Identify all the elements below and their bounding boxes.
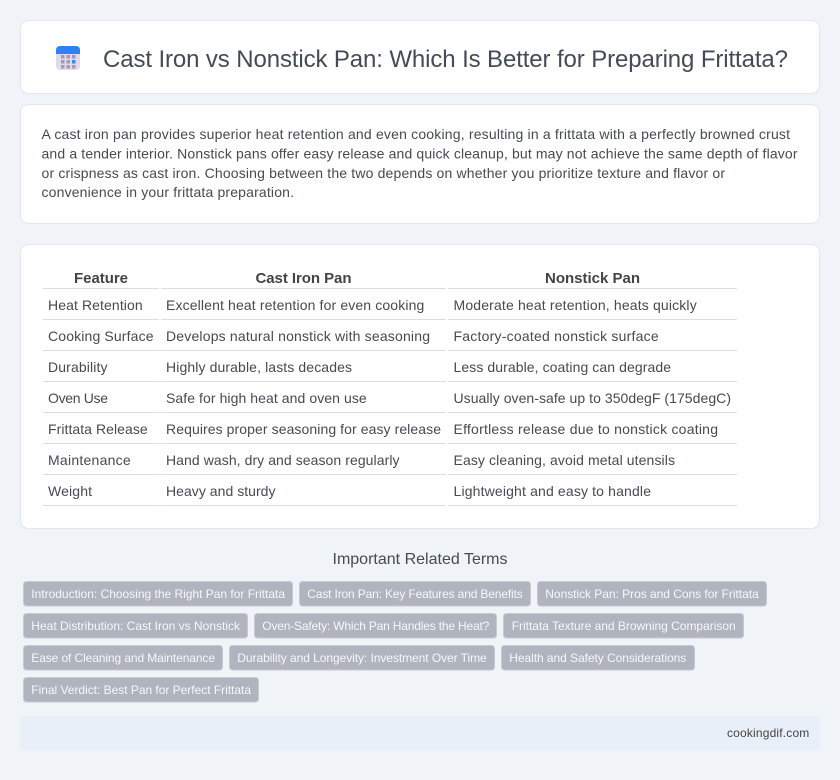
table row: maintenance: Easy cleaning, avoid metal utensils bbox=[454, 452, 675, 468]
table row: cooking surface bbox=[43, 328, 737, 351]
tag bbox=[538, 582, 766, 606]
table row: maintenance: Hand wash, dry and season regularly bbox=[166, 452, 400, 468]
panel: comparison table bbox=[20, 244, 820, 528]
footer source text: cookingdif.com bbox=[727, 726, 809, 740]
tag: Ease of Cleaning and Maintenance bbox=[31, 651, 215, 665]
table row: weight: Heavy and sturdy bbox=[166, 483, 276, 499]
table row: weight: Lightweight and easy to handle bbox=[454, 483, 651, 499]
text block: intro paragraph: A cast iron pan provides superior heat retention and even cooking, resulting in a frittata with a perfectly browned crust bbox=[42, 126, 790, 142]
table row: durability: Less durable, coating can degrade bbox=[454, 359, 671, 375]
table row: durability: Durability bbox=[48, 359, 108, 375]
text block: intro paragraph: convenience in your frittata preparation. bbox=[42, 184, 294, 200]
table row: maintenance bbox=[43, 452, 737, 475]
tag: Introduction: Choosing the Right Pan for Frittata bbox=[31, 587, 285, 601]
text block: intro paragraph: and a tender interior. Nonstick pans offer easy release and quick cleanup, but may not achieve the same depth of flavor bbox=[42, 146, 798, 162]
tag bbox=[24, 614, 248, 638]
table row: frittata release: Frittata Release bbox=[48, 421, 148, 437]
table row: durability bbox=[43, 359, 737, 382]
tag bbox=[24, 582, 292, 606]
table row: weight: Weight bbox=[48, 483, 92, 499]
tag bbox=[504, 614, 744, 638]
table row: weight bbox=[43, 483, 737, 506]
table row: oven use: Safe for high heat and oven use bbox=[166, 390, 367, 406]
table row: heat retention: Excellent heat retention for even cooking bbox=[166, 297, 424, 313]
tag bbox=[24, 646, 222, 670]
tag: Nonstick Pan: Pros and Cons for Frittata bbox=[545, 587, 759, 601]
tag: Frittata Texture and Browning Comparison bbox=[512, 619, 736, 633]
tag: Oven-Safety: Which Pan Handles the Heat? bbox=[262, 619, 490, 633]
table row: heat retention: Moderate heat retention, heats quickly bbox=[454, 297, 697, 313]
table row: frittata release: Effortless release due to nonstick coating bbox=[454, 421, 718, 437]
tag bbox=[254, 614, 496, 638]
table header row: Cast Iron Pan bbox=[256, 270, 352, 287]
table row: cooking surface: Cooking Surface bbox=[48, 328, 154, 344]
tag: Cast Iron Pan: Key Features and Benefits bbox=[307, 587, 523, 601]
text block: intro paragraph: or crispness as cast iron. Choosing between the two depends on whether you prioritize texture and flavor or bbox=[42, 165, 725, 181]
table row: frittata release bbox=[43, 421, 737, 444]
table row: oven use: Oven Use bbox=[48, 390, 108, 406]
panel: introduction text bbox=[20, 104, 820, 224]
tag: Heat Distribution: Cast Iron vs Nonstick bbox=[31, 619, 241, 633]
heading: related terms: Important Related Terms bbox=[332, 551, 508, 568]
table row: durability: Highly durable, lasts decades bbox=[166, 359, 352, 375]
tag bbox=[230, 646, 494, 670]
tag: Durability and Longevity: Investment Over Time bbox=[237, 651, 487, 665]
title: Cast Iron vs Nonstick Pan: Which Is Better for Preparing Frittata? bbox=[103, 46, 788, 73]
tag bbox=[502, 646, 694, 670]
footer bbox=[20, 716, 820, 750]
tag: Health and Safety Considerations bbox=[509, 651, 686, 665]
text block: intro paragraph bbox=[42, 126, 798, 200]
table row: heat retention bbox=[43, 297, 737, 320]
tag bbox=[300, 582, 530, 606]
table header row: Nonstick Pan bbox=[545, 270, 640, 287]
table header row: Feature bbox=[74, 270, 128, 287]
icon: calendar bbox=[56, 46, 80, 70]
table row: frittata release: Requires proper seasoning for easy release bbox=[166, 421, 441, 437]
table row: oven use: Usually oven-safe up to 350degF (175degC) bbox=[454, 390, 731, 406]
tag: Final Verdict: Best Pan for Perfect Frittata bbox=[31, 683, 251, 697]
table row: cooking surface: Factory-coated nonstick surface bbox=[454, 328, 659, 344]
table row: oven use bbox=[43, 390, 737, 413]
table row: heat retention: Heat Retention bbox=[48, 297, 143, 313]
panel: title header bbox=[20, 20, 820, 94]
tag bbox=[24, 678, 258, 702]
related terms tag list bbox=[24, 582, 766, 702]
table row: cooking surface: Develops natural nonstick with seasoning bbox=[166, 328, 430, 344]
table row: maintenance: Maintenance bbox=[48, 452, 131, 468]
table header row bbox=[43, 270, 737, 289]
